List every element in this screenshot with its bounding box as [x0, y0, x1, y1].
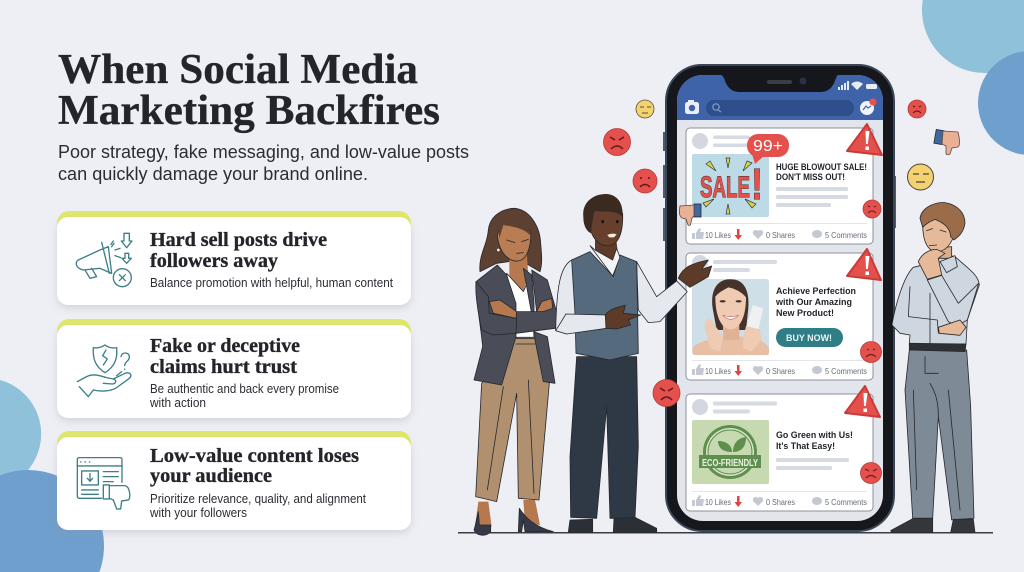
- icon: thumbs down right: [934, 129, 960, 155]
- engagement row: 10 Likes: [705, 498, 731, 507]
- card text: [149, 492, 366, 520]
- buy now button: [776, 328, 843, 347]
- product photo: [692, 279, 769, 355]
- engagement row: 0 Shares: [766, 498, 795, 507]
- card text: [149, 382, 339, 410]
- title: Marketing Backfires: [58, 88, 440, 134]
- sale image: [692, 154, 769, 217]
- panel: hard sell posts: [57, 211, 411, 305]
- phone body: [666, 65, 894, 531]
- engagement row: [692, 228, 867, 240]
- emoji: annoyed yellow small: [636, 100, 654, 118]
- person: woman arms crossed: [474, 208, 560, 535]
- icon: messenger: [860, 98, 877, 115]
- icon: thumbs down on post: [679, 204, 701, 225]
- card heading: [150, 335, 300, 378]
- card heading: followers away: [150, 250, 278, 272]
- search bar: [706, 100, 854, 116]
- post text: [776, 162, 867, 183]
- notification bubble: 99+: [753, 138, 783, 155]
- post card 3: [686, 394, 873, 511]
- engagement row: 10 Likes: [705, 231, 731, 240]
- post text: DON'T MISS OUT!: [776, 172, 845, 183]
- post text: Achieve Perfection: [776, 286, 856, 297]
- background circles: bottom left: [0, 380, 104, 572]
- icon: web page with thumbs down: [77, 458, 130, 509]
- sale image: !: [751, 160, 763, 209]
- card text: with your followers: [149, 506, 247, 520]
- card heading: claims hurt trust: [150, 356, 297, 378]
- engagement row: [692, 495, 867, 507]
- title: [58, 47, 440, 134]
- emoji: unhappy card 3: [860, 462, 882, 484]
- phone: [663, 65, 896, 531]
- engagement row: 10 Likes: [705, 367, 731, 376]
- icon: warning triangle 3: [845, 386, 880, 417]
- emoji: sad card 2: [860, 342, 882, 362]
- background circles: top right: [922, 0, 1024, 155]
- card text: with action: [149, 396, 206, 410]
- card text: Prioritize relevance, quality, and alignment: [150, 492, 366, 506]
- sale image: SALE: [700, 171, 750, 204]
- subtitle: can quickly damage your brand online.: [58, 163, 368, 184]
- post text: [775, 286, 856, 319]
- card text: Be authentic and back every promise: [150, 382, 339, 396]
- person: man pointing at phone: [556, 194, 712, 532]
- notch: [721, 74, 838, 92]
- engagement row: 5 Comments: [825, 498, 867, 507]
- card heading: [150, 445, 359, 487]
- panel: fake claims: [57, 319, 411, 418]
- post text: Go Green with Us!: [776, 430, 853, 441]
- phone screen: [677, 75, 883, 521]
- engagement row: [692, 364, 867, 376]
- emoji: angry lower: [653, 380, 680, 406]
- eco-friendly badge: [692, 420, 769, 484]
- emoji: unamused yellow: [908, 164, 934, 190]
- icon: warning triangle 2: [847, 249, 881, 280]
- card text: Balance promotion with helpful, human content: [150, 276, 393, 290]
- emoji: sad card 1: [863, 200, 881, 218]
- card heading: Fake or deceptive: [150, 335, 300, 357]
- icon: camera: [685, 100, 699, 114]
- icon: broken shield in hand: [77, 345, 131, 397]
- post card 1: [686, 128, 873, 244]
- engagement row: 5 Comments: [825, 367, 867, 376]
- ground line: [458, 532, 993, 534]
- card heading: [150, 229, 327, 272]
- eco-friendly badge: ECO-FRIENDLY: [702, 457, 758, 469]
- emoji: sad top right: [908, 100, 926, 118]
- icon: warning triangle 1: [847, 124, 882, 155]
- post text: with Our Amazing: [775, 297, 852, 308]
- card heading: Hard sell posts drive: [150, 229, 327, 251]
- post text: HUGE BLOWOUT SALE!: [776, 162, 867, 173]
- panel: low-value content: [57, 431, 411, 530]
- notification bubble: [747, 134, 789, 164]
- card heading: your audience: [150, 465, 272, 487]
- subtitle: [58, 141, 469, 184]
- phone side buttons: [663, 132, 896, 241]
- icon: megaphone: [76, 233, 132, 287]
- app header: [677, 75, 883, 120]
- post card 2: [686, 253, 873, 380]
- engagement row: 0 Shares: [766, 367, 795, 376]
- status icons: [838, 81, 877, 90]
- post text: New Product!: [776, 308, 834, 319]
- subtitle: Poor strategy, fake messaging, and low-value posts: [58, 141, 469, 162]
- emoji: sad medium: [633, 169, 657, 193]
- title: When Social Media: [58, 47, 418, 93]
- buy now button: BUY NOW!: [786, 333, 832, 344]
- engagement row: 5 Comments: [825, 231, 867, 240]
- person: thoughtful man: [891, 203, 979, 533]
- emoji: angry large: [604, 128, 630, 156]
- engagement row: 0 Shares: [766, 231, 795, 240]
- card heading: Low-value content loses: [150, 445, 359, 467]
- post text: It's That Easy!: [776, 441, 835, 452]
- post text: [776, 430, 853, 452]
